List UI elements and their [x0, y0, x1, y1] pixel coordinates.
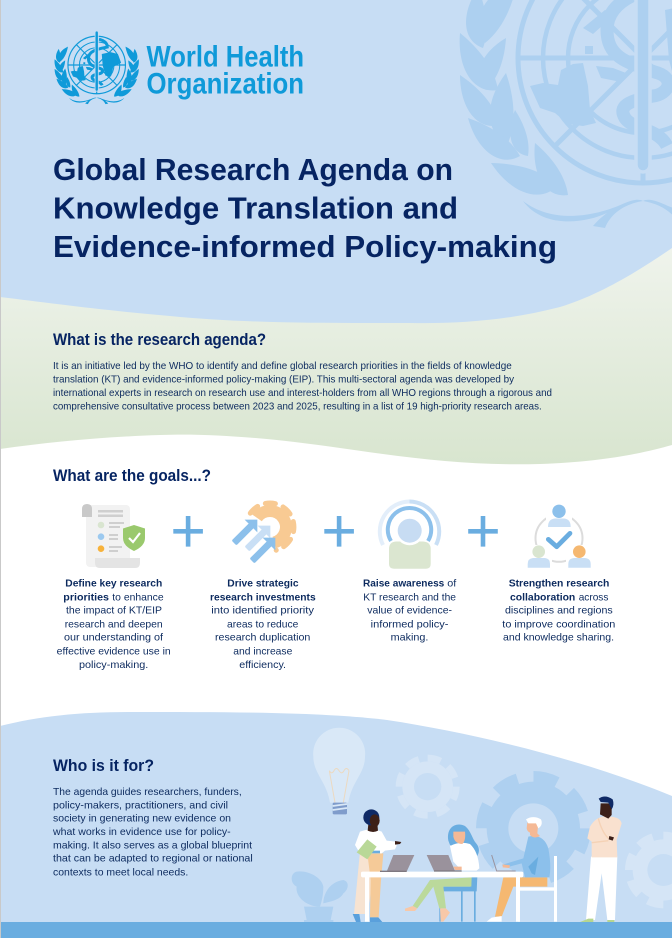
person: standing man	[580, 796, 622, 922]
icon: potted plant	[292, 871, 348, 922]
text block: who is it for description: society in generating new evidence on	[53, 814, 231, 825]
text block: goal 3: of	[447, 579, 456, 590]
heading: what are the goals: What are the goals...?	[53, 466, 211, 485]
text block: goal 1: the impact of KT/EIP	[66, 606, 162, 617]
title: Knowledge Translation and	[53, 190, 458, 226]
text block: goal 2: into identified priority	[211, 606, 315, 617]
icon: right gear	[629, 836, 672, 904]
text block: goal 1	[57, 579, 171, 671]
text block: goal 3: Raise awareness	[363, 579, 445, 590]
text block: goal 2: research investments	[210, 592, 316, 603]
icon: large faded WHO emblem	[446, 0, 672, 228]
text block: goal 1: priorities	[63, 592, 109, 603]
text block: goal 3	[363, 579, 456, 644]
text block: goal 3: KT research and the	[363, 592, 456, 603]
text block: who is it for description: The agenda guides researchers, funders,	[53, 787, 242, 798]
bottom strip	[0, 922, 672, 938]
text block: research agenda description: It is an initiative led by the WHO to identify and define global research priorities in the fields of knowledge	[53, 361, 512, 372]
heading: who is it for: Who is it for?	[53, 756, 154, 775]
icon: large gear	[482, 777, 585, 880]
panel: green research agenda band	[0, 240, 672, 464]
person: seated woman	[405, 824, 479, 922]
title: Global Research Agenda on	[53, 152, 453, 187]
text block: goal 4: and knowledge sharing.	[503, 633, 614, 644]
text block: who is it for description: contexts to meet local needs.	[53, 868, 188, 879]
text block: goal 4: collaboration	[510, 592, 575, 603]
panel: blue who-is-it-for wave	[0, 712, 672, 938]
chairs	[439, 856, 557, 922]
text block: research agenda description	[53, 361, 552, 413]
heading: what is the research agenda: What is the research agenda?	[53, 330, 266, 349]
text block: who is it for description	[52, 787, 253, 879]
text block: goal 1: our understanding of	[64, 633, 163, 644]
text block: who is it for description: making. It also serves as a global blueprint	[53, 840, 252, 851]
text block: goal 4: to improve coordination	[502, 620, 616, 631]
text block: research agenda description: translation (KT) and evidence-informed policy-making (EIP). This multi-sectoral agenda was developed by	[53, 375, 515, 386]
title	[53, 152, 557, 264]
text block: goal 1: research and deepen	[65, 620, 163, 631]
text block: goal 2: areas to reduce	[227, 620, 299, 631]
text block: goal 3: value of evidence-	[367, 606, 452, 617]
logo wordmark: World Health	[146, 40, 304, 74]
text block: who is it for description: policy-makers, practitioners, and civil	[53, 800, 228, 811]
text block: who is it for description: what works in evidence use for policy-	[52, 827, 231, 838]
icon: light bulb	[313, 728, 365, 814]
text block: goal 2: efficiency.	[239, 660, 286, 671]
icon: small gear	[399, 758, 456, 815]
text block: goal 2: and increase	[233, 647, 293, 658]
icon: document with shield	[82, 504, 145, 568]
text block: who is it for description: that can be adapted to regional or national	[53, 854, 253, 865]
text block: goal 4: Strengthen research	[509, 579, 609, 590]
icon: person with signal arcs	[380, 502, 439, 569]
title: Evidence-informed Policy-making	[53, 229, 557, 264]
logo wordmark	[146, 40, 304, 100]
icon: plus 2	[324, 516, 354, 547]
text block: goal 3: making.	[391, 633, 428, 644]
icon: plus 3	[468, 516, 498, 547]
person: seated man	[487, 817, 550, 922]
text block: goal 4: across	[579, 592, 608, 603]
icon: plus 1	[173, 516, 203, 547]
text block: goal 1: policy-making.	[79, 660, 148, 671]
text block: research agenda description: international experts in research on research use and interest-holders from all WHO regions through a rigorous and	[53, 388, 552, 399]
text block: goal 3: informed policy-	[371, 620, 448, 631]
text block: goal 2: research duplication	[215, 633, 311, 644]
text block: goal 4	[502, 579, 616, 644]
text block: goal 1: Define key research	[65, 579, 162, 590]
text block: goal 2: Drive strategic	[227, 579, 299, 590]
text block: research agenda description: comprehensive consultative process between 2023 and 2025, resulting in a list of 19 high-priority research areas.	[53, 402, 542, 413]
logo wordmark: Organization	[146, 68, 304, 100]
illustration: team at table with gears	[292, 728, 672, 922]
text block: goal 4: disciplines and regions	[505, 606, 613, 617]
text block: goal 2	[210, 579, 316, 671]
table with laptops	[361, 855, 523, 922]
icon: WHO logo emblem	[51, 31, 142, 104]
panel: blue header wave	[0, 0, 672, 323]
text block: goal 1: to enhance	[112, 592, 164, 603]
icon: gear with arrows	[228, 503, 294, 567]
person: standing woman	[353, 809, 401, 922]
text block: goal 1: effective evidence use in	[57, 647, 171, 658]
icon: collaboration circle	[526, 505, 592, 569]
